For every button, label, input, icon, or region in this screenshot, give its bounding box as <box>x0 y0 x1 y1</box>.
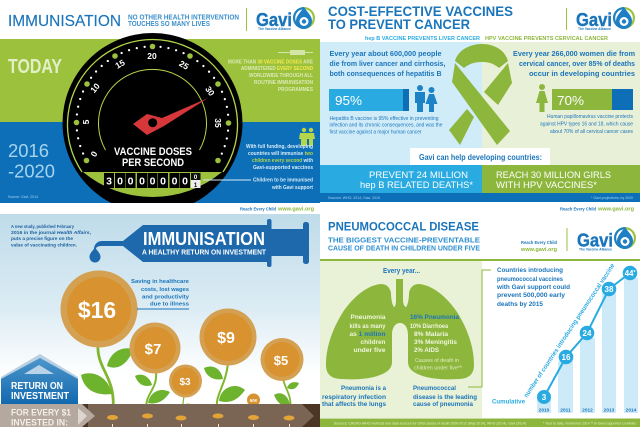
callout: funding: countries will immunise two <box>248 151 314 157</box>
callout: today <box>228 60 314 93</box>
reach every child: Reach Every Child <box>521 240 557 245</box>
label: 2016-2020: 2016 <box>8 141 49 161</box>
axis label: number of countries introducing pneumococcal vaccine <box>523 262 617 399</box>
callout: saving: Saving in healthcare <box>131 279 190 285</box>
text: countries <box>496 267 570 308</box>
coin: 50c <box>247 394 260 406</box>
text: respiratory: respiratory infection <box>322 394 386 401</box>
footer band: Sources: CHERG-WHO methods and data sources for child causes of death 2000-2012 (May 2014), WHO (2014), Gavi (2014) <box>334 422 526 426</box>
bar: 95%: 95% <box>335 93 362 108</box>
footer <box>560 206 634 212</box>
callout: today: PROGRAMMES <box>278 87 313 93</box>
coin: $5: $5 <box>274 353 288 368</box>
bar chart <box>492 262 638 414</box>
bracket line <box>468 270 491 387</box>
coin: $16 <box>60 270 138 348</box>
bar: 95% <box>329 89 409 111</box>
logo divider <box>566 228 568 251</box>
subheading: THE BIGGEST VACCINE-PREVENTABLE <box>328 236 480 244</box>
text: hep B detail: Hepatitis B vaccine is 95% effective in preventing <box>330 116 439 122</box>
heading: TO PREVENT CANCER <box>328 16 470 32</box>
text: countries: Countries introducing <box>497 267 563 274</box>
footer band: * Year to date, November 2014 ** in Gavi-supported countries <box>543 422 636 426</box>
callout: today: ROUTINE IMMUNISATION <box>254 80 313 86</box>
sublabels: hep B VACCINE PREVENTS LIVER CANCER <box>365 36 480 42</box>
footer: Reach Every Child <box>560 206 596 212</box>
gauge caption <box>114 148 192 166</box>
lungs right text: 8% Malaria <box>414 331 448 338</box>
gauge: 5 <box>81 119 91 124</box>
callout: funding: Gavi-supported vaccines <box>253 165 313 171</box>
text: HPV <box>513 49 635 78</box>
panel: immunisation speedometer <box>0 7 320 213</box>
logo: Gavi: Gavi <box>256 10 292 30</box>
text: hep B detail: infection and its chronic consequences, and was the <box>330 122 443 128</box>
lungs right text <box>410 314 459 354</box>
band: hep B: hep B RELATED DEATHS* <box>360 180 473 191</box>
bar chart: * <box>633 270 635 276</box>
band: hep B: PREVENT 24 MILLION <box>369 170 468 181</box>
coin: $16: $16 <box>78 297 116 323</box>
logo divider <box>566 8 567 30</box>
text: leading cause <box>413 385 477 408</box>
label: cumulative: Cumulative <box>492 399 526 406</box>
logo: Gavi: Gavi <box>577 230 613 250</box>
text: countries: pneumococcal vaccines <box>497 276 563 283</box>
seed coins <box>107 414 294 420</box>
icon: man and woman <box>415 85 438 112</box>
text: leading cause: Pneumococcal <box>413 385 456 392</box>
subheading: NO OTHER HEALTH INTERVENTION <box>128 14 239 22</box>
logo: Gavi: The Vaccine Alliance <box>579 248 612 252</box>
text: HPV: Every year 266,000 women die from <box>513 49 635 58</box>
counter caption: Children to be immunised <box>253 178 313 184</box>
text: leading cause: disease is the leading <box>413 394 477 401</box>
text: hep B: both consequences of hepatitis B <box>330 69 442 78</box>
footer: www.gavi.org <box>277 206 314 212</box>
text: respiratory: Pneumonia is a <box>341 385 386 392</box>
logo divider <box>246 8 247 31</box>
gauge: 20 <box>147 51 157 61</box>
footer: Reach Every Child <box>240 206 276 212</box>
panel: return on investment <box>0 214 320 427</box>
band: HPV <box>482 165 640 193</box>
footer: www.gavi.org <box>597 206 634 212</box>
counter: 0 <box>128 176 134 188</box>
intro text: puts a precise figure on the <box>11 236 73 241</box>
label: for every $1 <box>0 404 95 427</box>
icon: children <box>299 128 315 146</box>
coin: $9 <box>200 308 256 366</box>
callout: funding: children every second with <box>252 158 313 164</box>
text: countries: prevent 500,000 early <box>497 292 565 299</box>
heading <box>328 3 513 32</box>
lungs left text <box>350 314 386 354</box>
panel background green <box>0 39 320 122</box>
callout: today: MORE THAN 30 VACCINE DOSES ARE <box>228 60 313 66</box>
lungs left text: under five <box>354 347 386 354</box>
lungs right text: 10% Diarrhoea <box>410 323 448 330</box>
counter: 0 <box>194 175 198 181</box>
bar chart: 3 <box>542 393 547 402</box>
logo: Gavi: The Vaccine Alliance <box>258 27 291 31</box>
coin: 50c: 50¢ <box>250 398 258 403</box>
bar: 70% <box>552 89 633 110</box>
label: 2016-2020 <box>8 141 55 182</box>
syringe banner <box>90 219 309 267</box>
text: respiratory <box>322 385 386 408</box>
text: hep B detail <box>330 116 443 136</box>
every year: Every year... <box>383 268 420 275</box>
gauge: 15 <box>113 57 127 71</box>
leaves <box>81 348 299 409</box>
label: 2016-2020: -2020 <box>8 162 55 182</box>
coin: $5 <box>260 338 304 381</box>
footer band <box>320 418 640 427</box>
counter: 0 <box>150 176 156 188</box>
callout: saving: due to illness <box>150 302 189 308</box>
text: HPV detail <box>540 114 633 135</box>
bar: 70%: 70% <box>557 93 584 108</box>
background: HPV <box>482 42 640 165</box>
text: leading cause: cause of pneumonia <box>413 401 473 408</box>
bar chart: 2010 <box>539 408 550 414</box>
text: HPV detail: against HPV types 16 and 18, which cause <box>540 122 633 128</box>
sky background <box>0 214 320 404</box>
causes note <box>414 358 462 372</box>
counter: 0 <box>117 176 123 188</box>
bar chart: 24 <box>583 329 592 338</box>
bar chart: 38 <box>605 285 614 294</box>
label: today: TODAY <box>8 56 63 78</box>
text: HPV: occur in developing countries <box>529 69 635 78</box>
plants <box>98 343 291 412</box>
text: hep B: die from liver cancer and cirrhosis, <box>330 59 446 68</box>
callout: funding: With full funding, developing <box>246 144 313 150</box>
subheading <box>128 14 239 28</box>
text: HPV detail: Human papillomavirus vaccine protects <box>547 114 633 120</box>
logo: Gavi <box>256 7 315 31</box>
callout: saving: costs, lost wages <box>141 287 189 293</box>
callout: today: ADMINISTERED EVERY SECOND <box>241 66 313 72</box>
syringe banner: A HEALTHY RETURN ON INVESTMENT <box>142 250 267 257</box>
heading: COST-EFFECTIVE VACCINES <box>328 3 513 19</box>
counter <box>104 173 200 189</box>
syringe banner: IMMUNISATION <box>143 229 265 249</box>
lungs right text: 2% AIDS <box>414 347 439 354</box>
text: hep B: Every year about 600,000 people <box>330 49 442 58</box>
heading: immunisation: IMMUNISATION <box>8 13 121 30</box>
icon: woman <box>536 84 548 112</box>
coin: $3 <box>169 364 202 398</box>
callout leader <box>134 307 189 311</box>
text: hep B detail: first vaccine against a major human cancer <box>330 130 422 136</box>
heading: PNEUMOCOCCAL DISEASE <box>328 222 479 234</box>
subheading <box>328 236 480 252</box>
syringe icon <box>278 50 313 55</box>
intro text: A new study, published February <box>11 224 74 229</box>
gauge: 30 <box>203 84 217 98</box>
logo: Gavi: The Vaccine Alliance <box>578 27 611 31</box>
source: Source: Gavi, 2014 <box>8 195 38 199</box>
counter: 0 <box>182 176 188 188</box>
bar chart: 16 <box>562 353 571 362</box>
subheading: CAUSE OF DEATH IN CHILDREN UNDER FIVE <box>328 244 480 252</box>
callout box <box>410 148 550 165</box>
gauge caption: PER SECOND <box>122 157 184 169</box>
causes note: Causes of death in <box>415 358 459 364</box>
text: HPV detail: about 70% of all cervical cancer cases <box>550 129 633 135</box>
lungs right text: 16% Pneumonia <box>410 314 459 321</box>
band: HPV: REACH 30 MILLION GIRLS <box>496 170 611 181</box>
lungs <box>326 279 474 379</box>
logo: Gavi: Gavi <box>576 10 612 30</box>
causes note: children under five** <box>414 366 462 372</box>
callout: saving <box>131 279 190 308</box>
gauge caption: VACCINE DOSES <box>114 146 192 158</box>
coin: $7: $7 <box>145 341 161 358</box>
intro text <box>11 224 91 248</box>
panel: pneumococcal disease <box>320 222 640 427</box>
bar chart: 2012 <box>582 408 593 414</box>
counter leader line <box>203 180 251 181</box>
gauge: 0 <box>88 149 100 159</box>
coin: $3: $3 <box>179 377 191 388</box>
subheading: TOUCHES SO MANY LIVES <box>128 21 210 28</box>
footer <box>240 206 314 212</box>
ribbon <box>449 44 512 145</box>
band: sources: Sources: WHO, 2014; Gavi, 2015 <box>328 196 380 200</box>
lungs right text: 3% Meningitis <box>414 339 457 346</box>
band: sources <box>320 193 640 202</box>
text: respiratory: that affects the lungs <box>322 401 386 408</box>
lungs left text: as 1 million <box>350 331 386 338</box>
lungs left text: Pneumonia <box>350 314 386 321</box>
intro text: 2016 in the journal Health Affairs , <box>11 230 91 235</box>
sublabels <box>365 36 608 42</box>
soil band <box>0 404 320 427</box>
gauge: 25 <box>177 58 191 72</box>
bar chart: 2013 <box>604 408 615 414</box>
text: hep B <box>330 49 446 78</box>
gauge: 10 <box>88 81 102 95</box>
lungs left text: children <box>360 339 386 346</box>
callout: saving: and productivity <box>142 294 190 300</box>
band: HPV: WITH HPV VACCINES* <box>496 180 597 191</box>
gauge: 35 <box>213 118 223 128</box>
header rule <box>320 259 640 261</box>
roots <box>112 424 290 427</box>
counter: 1 <box>194 183 198 189</box>
bar chart: 44 <box>625 269 633 278</box>
text: HPV: cervical cancer, over 85% of deaths <box>519 59 635 68</box>
needle <box>133 98 208 135</box>
left background <box>320 261 482 418</box>
counter: 0 <box>172 176 178 188</box>
counter: 0 <box>139 176 145 188</box>
label: for every $1: FOR EVERY $1 <box>11 408 72 418</box>
callout: funding <box>246 144 314 171</box>
intro text: value of vaccinating children. <box>11 242 77 248</box>
logo: Gavi <box>576 7 635 31</box>
lungs left text: kills as many <box>350 323 386 330</box>
callout box: Gavi can help developing countries: <box>419 153 542 162</box>
bar chart: 2014 <box>626 408 637 414</box>
gauge <box>62 33 242 213</box>
house: return on investment: RETURN ON <box>11 381 63 392</box>
reach every child: www.gavi.org <box>520 247 557 253</box>
reach every child <box>520 240 557 253</box>
band: sources: * Gavi projections, by 2020 <box>591 196 633 200</box>
band: hep B <box>320 165 482 193</box>
house: return on investment: INVESTMENT <box>11 391 69 402</box>
panel: vaccines to prevent cancer <box>320 3 640 212</box>
text: countries: with Gavi support could <box>496 284 570 291</box>
bar chart: 2011 <box>560 408 571 414</box>
text: countries: deaths by 2015 <box>497 301 543 308</box>
counter caption <box>253 178 313 191</box>
callout: today: WORLDWIDE THROUGH ALL <box>249 73 314 79</box>
counter: 0 <box>160 176 166 188</box>
coin: $7 <box>130 322 180 374</box>
counter: 3 <box>106 176 112 188</box>
counter caption: with Gavi support <box>271 185 313 191</box>
panel background blue <box>0 122 320 203</box>
coin: $9: $9 <box>217 330 235 347</box>
logo: Gavi <box>577 227 636 252</box>
house: return on investment <box>1 354 78 404</box>
background: hep B <box>320 42 482 165</box>
sublabels: HPV VACCINE PREVENTS CERVICAL CANCER <box>485 36 608 42</box>
